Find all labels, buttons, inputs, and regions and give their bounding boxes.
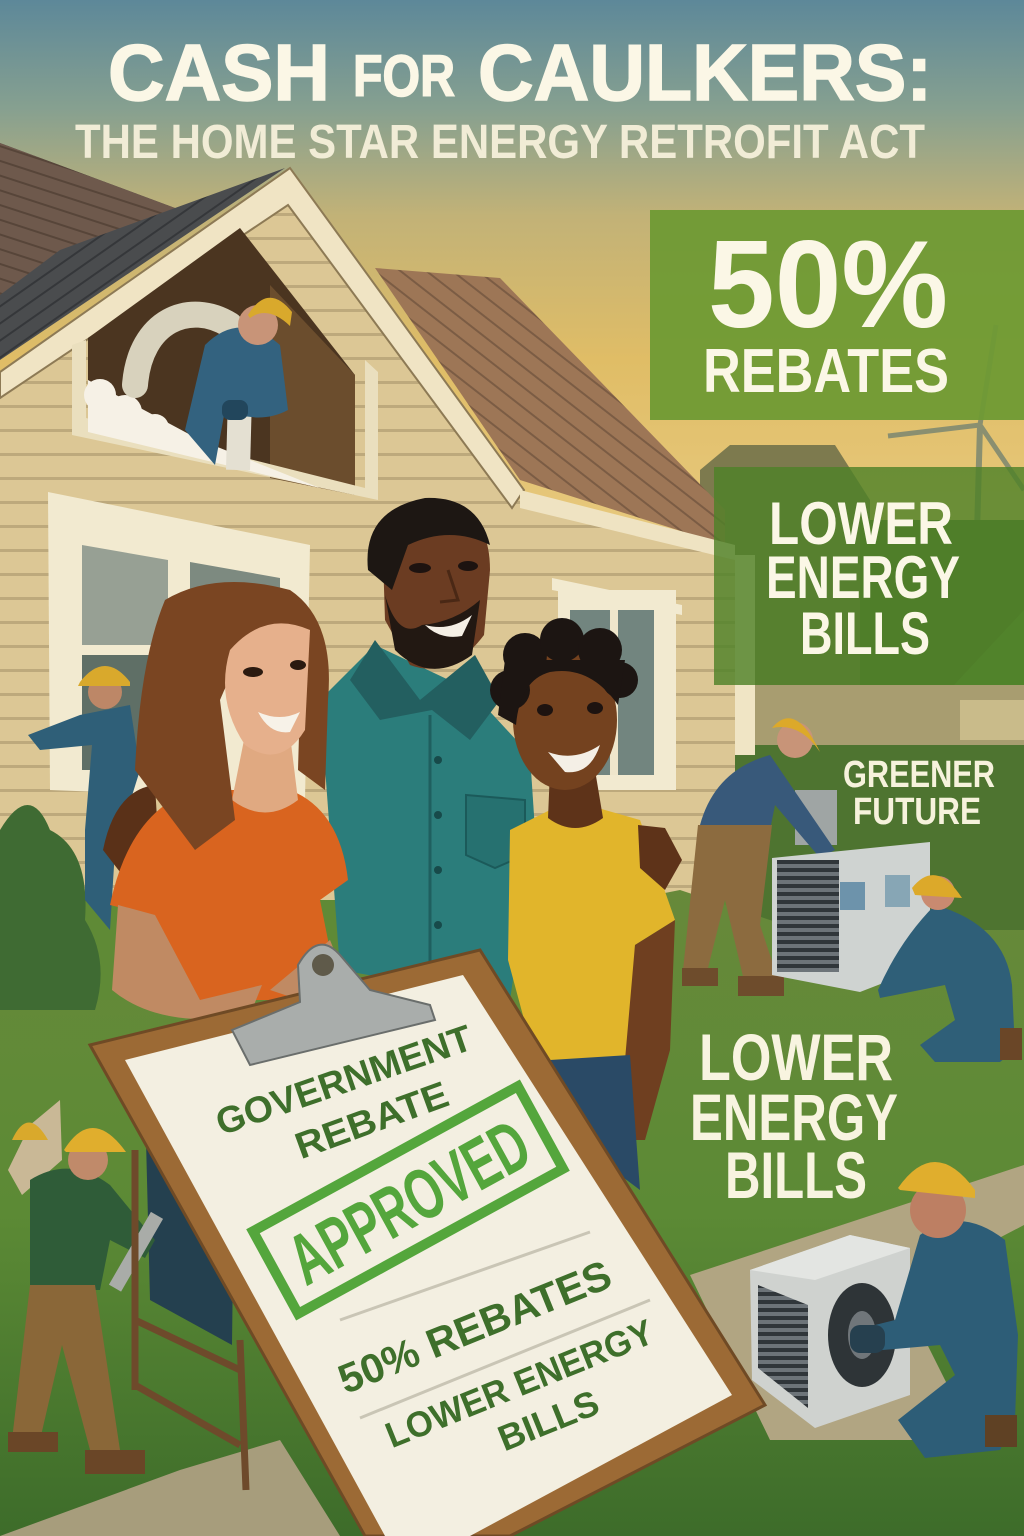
greener future label: FUTURE <box>853 791 981 833</box>
panel: lower energy bills: ENERGY <box>766 544 960 611</box>
rebate text <box>332 1251 659 1459</box>
approved stamp <box>253 1086 563 1314</box>
greener future label <box>843 754 995 833</box>
attic worker <box>185 298 292 465</box>
window worker <box>28 666 140 930</box>
panel: 50% rebates: 50% <box>708 216 948 354</box>
left dark roof <box>0 143 285 360</box>
lower energy bills label: LOWER <box>699 1020 893 1094</box>
house <box>0 143 755 900</box>
legs behind clipboard <box>145 1100 235 1345</box>
rebate text: 50% REBATES <box>332 1251 618 1403</box>
lower energy bills label <box>690 1020 898 1212</box>
government rebate: REBATE <box>290 1074 454 1167</box>
panel: lower energy bills: LOWER <box>769 490 953 557</box>
panel: 50% rebates <box>650 210 1024 420</box>
background sky <box>0 0 1024 900</box>
title: CAULKERS: <box>478 28 932 117</box>
lawn <box>0 890 1024 1536</box>
man <box>103 498 535 1000</box>
walkway <box>690 1165 1024 1440</box>
clip <box>232 945 435 1065</box>
attic opening <box>88 228 355 495</box>
distant house <box>700 445 1024 755</box>
board <box>90 950 765 1536</box>
ladder <box>135 1150 246 1490</box>
man's hand left <box>103 785 160 885</box>
man's hand right <box>638 825 682 890</box>
siding <box>0 200 735 900</box>
shrub <box>0 805 101 1010</box>
title: CASH <box>108 28 330 117</box>
worker at condenser <box>682 718 837 996</box>
kneeling worker <box>878 875 1022 1062</box>
government rebate: GOVERNMENT <box>211 1017 478 1143</box>
paper lines <box>340 1232 650 1418</box>
wind turbine <box>888 325 1024 570</box>
lower energy bills label: BILLS <box>725 1138 867 1212</box>
back roof <box>375 268 725 545</box>
panel: lower energy bills <box>714 467 1024 685</box>
panel: 50% rebates: REBATES <box>703 337 949 406</box>
title: FOR <box>353 44 455 109</box>
right window <box>552 578 682 790</box>
approved stamp: APPROVED <box>275 1105 544 1301</box>
woman <box>110 582 348 1019</box>
hose <box>135 315 230 385</box>
rebate text: LOWER ENERGY <box>380 1311 659 1456</box>
main window <box>48 492 310 800</box>
clipboard <box>90 945 765 1536</box>
child <box>490 618 682 1190</box>
lower worker <box>850 1162 1018 1458</box>
back hedge <box>735 745 1024 985</box>
left worker <box>8 1100 163 1474</box>
panel: lower energy bills: BILLS <box>800 600 930 667</box>
outdoor AC unit <box>750 1235 910 1428</box>
heat pump unit large <box>772 842 930 992</box>
family <box>103 498 682 1190</box>
title <box>75 28 932 169</box>
rebate text: BILLS <box>492 1382 605 1459</box>
lower energy bills label: ENERGY <box>690 1080 898 1154</box>
insulation <box>84 379 320 488</box>
gable trim <box>0 168 524 508</box>
title: THE HOME STAR ENERGY RETROFIT ACT <box>75 116 925 169</box>
paper <box>125 975 732 1536</box>
